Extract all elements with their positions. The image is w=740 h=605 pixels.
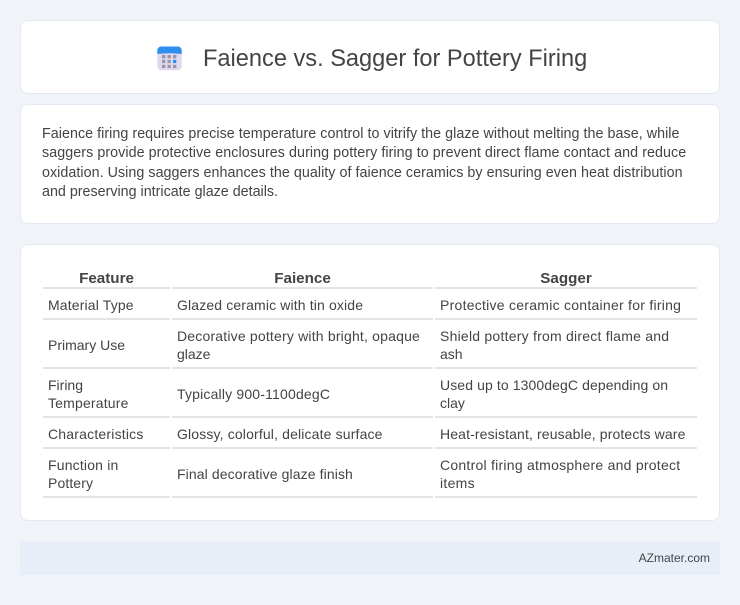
row: characteristics: Heat-resistant, reusable, protects ware xyxy=(440,426,686,442)
row: characteristics: Glossy, colorful, delicate surface xyxy=(177,426,383,442)
row: material type: Glazed ceramic with tin oxide xyxy=(177,297,363,313)
table header: Feature xyxy=(79,270,134,287)
icon: calendar xyxy=(157,46,182,70)
intro text: and preserving intricate glaze details. xyxy=(42,184,278,200)
intro text: saggers provide protective enclosures during pottery firing to prevent direct flame contact and reduce xyxy=(42,145,686,161)
table header xyxy=(79,270,592,287)
comparison table panel xyxy=(20,244,720,521)
row: function in pottery xyxy=(48,457,680,491)
footer source: AZmater.com xyxy=(639,551,710,565)
table header: Sagger xyxy=(540,270,592,287)
row: firing temperature: clay xyxy=(440,395,465,411)
row: primary use xyxy=(48,328,669,362)
row: function in pottery: Final decorative glaze finish xyxy=(177,466,353,482)
row: primary use: ash xyxy=(440,346,463,362)
intro text xyxy=(42,126,686,200)
intro text: Faience firing requires precise temperature control to vitrify the glaze without melting the base, while xyxy=(42,126,680,142)
row: firing temperature: Typically 900-1100degC xyxy=(177,386,330,402)
row: material type: Material Type xyxy=(48,297,134,313)
row: function in pottery: Function in xyxy=(48,457,118,473)
intro text: oxidation. Using saggers enhances the quality of faience ceramics by ensuring even heat distribution xyxy=(42,165,683,181)
row: characteristics: Characteristics xyxy=(48,426,144,442)
row: firing temperature: Firing xyxy=(48,377,83,393)
title: Faience vs. Sagger for Pottery Firing xyxy=(203,46,587,72)
row: firing temperature: Used up to 1300degC depending on xyxy=(440,377,668,393)
row: primary use: Shield pottery from direct flame and xyxy=(440,328,669,344)
title card xyxy=(20,20,720,94)
footer bar xyxy=(20,541,720,575)
row: function in pottery: Control firing atmosphere and protect xyxy=(440,457,680,473)
row: firing temperature: Temperature xyxy=(48,395,129,411)
row: material type xyxy=(48,297,681,313)
row: characteristics xyxy=(48,426,686,442)
row: material type: Protective ceramic container for firing xyxy=(440,297,681,313)
row: primary use: Primary Use xyxy=(48,337,125,353)
table header: Faience xyxy=(274,270,331,287)
row: function in pottery: Pottery xyxy=(48,475,93,491)
row: primary use: Decorative pottery with bright, opaque xyxy=(177,328,420,344)
intro panel xyxy=(20,104,720,224)
row: firing temperature xyxy=(48,377,668,411)
row: primary use: glaze xyxy=(177,346,210,362)
row: function in pottery: items xyxy=(440,475,475,491)
